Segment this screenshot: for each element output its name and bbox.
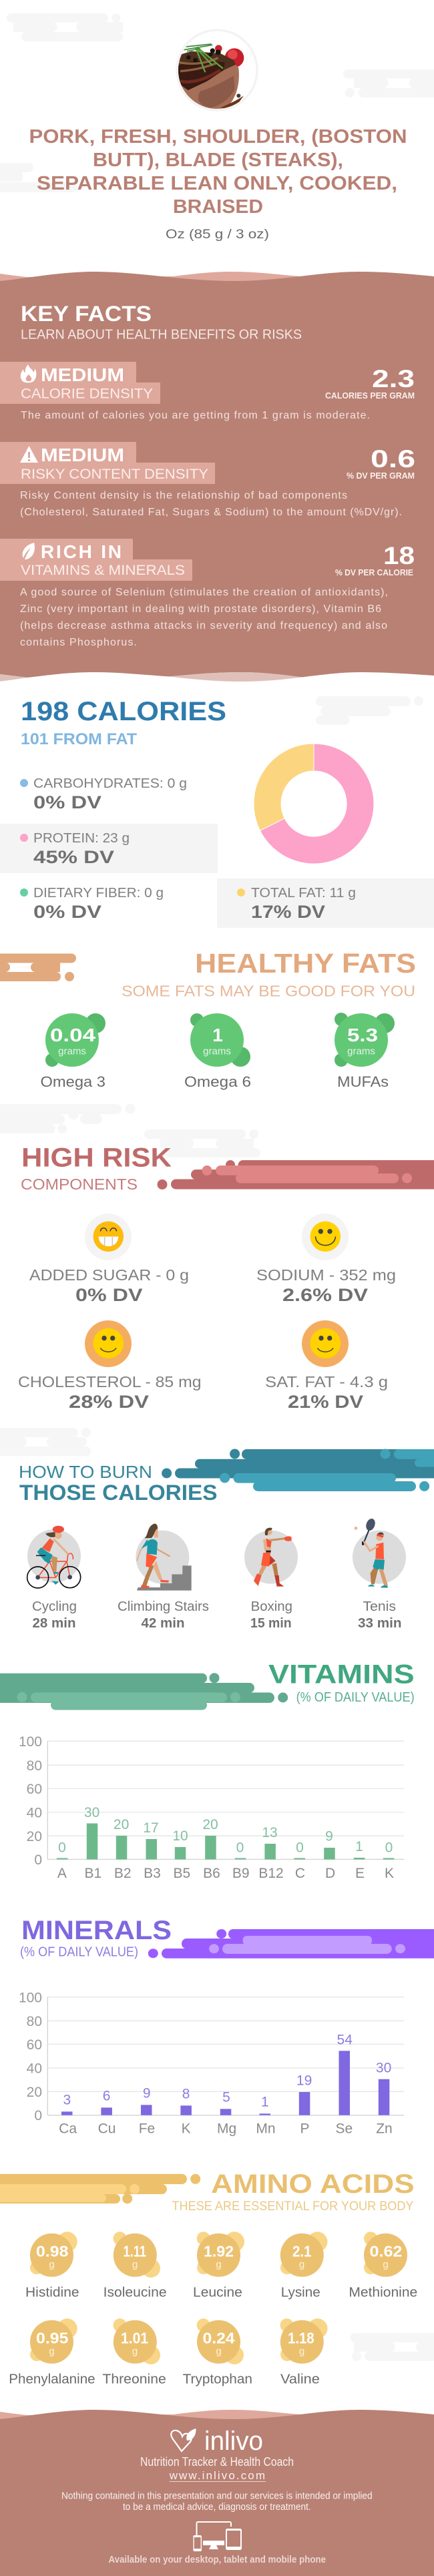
amino: threonine: g [132, 2346, 138, 2357]
activity: climbing stairs: Climbing Stairs [118, 1599, 209, 1614]
section header: minerals [20, 1916, 434, 1960]
title: SEPARABLE LEAN ONLY, COOKED, [37, 173, 397, 194]
disclaimer [61, 2490, 373, 2513]
section header: vitamins [0, 1659, 415, 1710]
bar values: 8 [182, 2087, 190, 2102]
rating: MEDIUM [41, 364, 124, 385]
risk: saturated fat [265, 1320, 388, 1412]
bar values: 30 [84, 1805, 99, 1820]
y axis: 20 [27, 2085, 42, 2100]
activity: climbing stairs: 42 min [142, 1616, 184, 1631]
amino: threonine [102, 2318, 166, 2387]
serving size: Oz (85 g / 3 oz) [166, 228, 269, 242]
icon: neutral smile face [302, 1320, 349, 1367]
unit: CALORIES PER GRAM [325, 391, 415, 401]
x axis: K [182, 2121, 191, 2137]
calories heading: 198 CALORIES [21, 697, 226, 726]
value: 2.3 [372, 365, 415, 393]
y axis: 40 [27, 1805, 42, 1821]
section header: vitamins: VITAMINS [268, 1659, 415, 1689]
x axis: Ca [59, 2121, 77, 2137]
section header: vitamins: (% OF DAILY VALUE) [296, 1690, 415, 1705]
section header: high risk components: COMPONENTS [21, 1176, 138, 1193]
bar values: 0 [385, 1840, 393, 1856]
fact: rich in vitamins and minerals [0, 539, 415, 648]
macro: carbohydrates [20, 776, 187, 812]
fact: risky content density [0, 442, 415, 518]
risk: cholesterol: CHOLESTEROL - 85 mg [18, 1373, 202, 1390]
activity: boxing [244, 1528, 298, 1631]
x axis [59, 2121, 393, 2137]
risk: sodium: 2.6% DV [282, 1285, 368, 1305]
x axis: B2 [114, 1866, 132, 1881]
label: VITAMINS & MINERALS [21, 562, 185, 578]
icon: smiling face [302, 1214, 349, 1260]
icon: leaf [23, 543, 35, 559]
amino: valine: 1.18 [288, 2330, 314, 2347]
x axis: A [57, 1866, 67, 1881]
icon: neutral smile face [85, 1320, 132, 1367]
description: The amount of calories you are getting from 1 gram is moderate. [21, 410, 370, 421]
y axis: 80 [27, 1758, 42, 1774]
amino: tryptophan: Tryptophan [183, 2372, 252, 2387]
y axis: 0 [34, 2108, 42, 2123]
icon: warning [20, 446, 38, 463]
bars [57, 1824, 394, 1860]
amino: histidine: 0.98 [36, 2243, 69, 2260]
macro: carbohydrates: 0% DV [33, 792, 101, 812]
macro: protein [0, 824, 218, 873]
bar values: 10 [172, 1828, 188, 1844]
amino: lysine [280, 2232, 327, 2300]
amino: histidine: Histidine [25, 2286, 79, 2300]
risk: saturated fat: 21% DV [288, 1392, 363, 1412]
y axis: 100 [19, 1990, 42, 2005]
amino: isoleucine: g [132, 2259, 138, 2270]
bar values: 1 [261, 2095, 269, 2110]
x axis: C [295, 1866, 305, 1881]
description [20, 587, 388, 648]
risk: cholesterol: 28% DV [69, 1392, 149, 1412]
activity: tennis: Tenis [363, 1599, 396, 1614]
bar chart: vitamins [19, 1734, 404, 1881]
y axis [19, 1990, 42, 2123]
fat: MUFAs: MUFAs [337, 1073, 389, 1090]
heading: key facts: KEY FACTS [21, 302, 152, 326]
amino: threonine: Threonine [102, 2372, 166, 2387]
disclaimer: to be a medical advice, diagnosis or treatment. [123, 2501, 311, 2513]
illustration: cyclist [27, 1526, 81, 1588]
amino: tryptophan: 0.24 [203, 2330, 235, 2347]
disclaimer: Nothing contained in this presentation and our services is intended or implied [61, 2490, 373, 2501]
x axis: Se [335, 2121, 353, 2137]
activity: boxing: 15 min [250, 1616, 292, 1631]
macro: dietary fiber [20, 886, 164, 922]
bar values: 3 [63, 2092, 71, 2107]
fat: omega 3: 0.04 [50, 1025, 96, 1045]
availability note: Available on your desktop, tablet and mobile phone [108, 2554, 326, 2565]
section header: how to burn those calories: THOSE CALORIES [19, 1481, 218, 1505]
bar values: 0 [236, 1840, 244, 1856]
description: contains Phosphorus. [20, 637, 137, 648]
amino: threonine: 1.01 [121, 2330, 148, 2347]
panel: key facts [0, 272, 434, 682]
amino: tryptophan [183, 2318, 252, 2387]
x axis: K [385, 1866, 394, 1881]
bar values: 54 [337, 2032, 353, 2047]
x axis: P [300, 2121, 310, 2137]
illustration: boxer [244, 1528, 298, 1587]
x axis: Mg [217, 2121, 236, 2137]
risk: sodium: SODIUM - 352 mg [256, 1266, 396, 1284]
bar values: 6 [103, 2089, 110, 2104]
calories from fat: 101 FROM FAT [21, 730, 137, 748]
x axis: B5 [174, 1866, 190, 1881]
risk: cholesterol [18, 1320, 202, 1412]
activity: climbing stairs [118, 1524, 209, 1631]
amino: tryptophan: g [216, 2346, 222, 2357]
description [20, 490, 402, 518]
fact: calorie density [0, 362, 415, 421]
icon: desktop, tablet and phone [193, 2521, 242, 2551]
amino: isoleucine [103, 2232, 167, 2300]
bar values: 0 [58, 1840, 66, 1856]
amino: methionine: Methionine [349, 2286, 417, 2300]
section header: how to burn those calories [19, 1449, 434, 1505]
bar values: 9 [143, 2086, 151, 2101]
amino: lysine: 2.1 [292, 2243, 312, 2260]
amino: phenylalanine: g [49, 2346, 55, 2357]
amino: lysine: Lysine [281, 2286, 320, 2300]
description: (helps decrease asthma attacks in severity and frequency) and also [20, 620, 387, 631]
bar values [63, 2032, 391, 2110]
amino: valine [280, 2318, 327, 2387]
bar values: 20 [114, 1817, 129, 1832]
section header: amino acids: THESE ARE ESSENTIAL FOR YOUR BODY [172, 2199, 414, 2214]
icon: grinning face [85, 1214, 132, 1260]
macro: total fat [217, 878, 434, 928]
amino: isoleucine: 1.11 [123, 2243, 146, 2260]
fat: omega 6 [184, 1013, 251, 1090]
section header: minerals: MINERALS [21, 1916, 172, 1945]
rating: MEDIUM [41, 445, 124, 465]
x axis: Cu [98, 2121, 116, 2137]
value: 18 [383, 542, 415, 569]
fat: MUFAs [335, 1013, 395, 1090]
website: www.inlivo.com [169, 2469, 265, 2482]
icon: flame [21, 364, 36, 382]
risk: sodium [256, 1214, 396, 1305]
x axis: E [355, 1866, 365, 1881]
fat: omega 3: grams [58, 1045, 86, 1057]
x axis: B6 [203, 1866, 220, 1881]
x axis: Zn [376, 2121, 393, 2137]
amino: leucine: g [216, 2259, 222, 2270]
amino: phenylalanine: Phenylalanine [9, 2372, 95, 2387]
x axis: Mn [256, 2121, 276, 2137]
amino: leucine: 1.92 [204, 2243, 234, 2260]
fat: omega 3 [40, 1013, 105, 1090]
y axis: 20 [27, 1829, 42, 1844]
label: RISKY CONTENT DENSITY [21, 466, 208, 482]
bar chart: minerals [19, 1990, 404, 2137]
macro: carbohydrates: CARBOHYDRATES: 0 g [33, 776, 187, 791]
bar values: 17 [143, 1820, 159, 1836]
bar values [58, 1805, 393, 1856]
activity: tennis [353, 1517, 406, 1631]
bars [61, 2051, 389, 2115]
bar values: 9 [325, 1829, 333, 1844]
description: A good source of Selenium (stimulates the creation of antioxidants), [20, 587, 388, 598]
amino: isoleucine: Isoleucine [103, 2286, 167, 2300]
amino: valine: g [299, 2346, 304, 2357]
illustration: woman on stairs [136, 1524, 192, 1591]
amino: valine: Valine [280, 2372, 320, 2387]
rating: RICH IN [41, 541, 122, 562]
activity: boxing: Boxing [251, 1599, 292, 1614]
subheading: LEARN ABOUT HEALTH BENEFITS OR RISKS [21, 327, 302, 342]
fat: omega 6: 1 [212, 1025, 223, 1045]
activity: cycling [27, 1526, 81, 1631]
section header: amino acids [0, 2169, 415, 2214]
description: Risky Content density is the relationship of bad components [20, 490, 347, 501]
bar values: 5 [222, 2090, 230, 2105]
panel: footer [0, 2410, 434, 2576]
amino: leucine [193, 2232, 244, 2300]
bar values: 0 [296, 1840, 304, 1856]
amino: lysine: g [299, 2259, 304, 2270]
title: PORK, FRESH, SHOULDER, (BOSTON [29, 126, 407, 148]
x axis: B9 [232, 1866, 250, 1881]
risk: added sugar [29, 1214, 189, 1305]
title [29, 126, 407, 218]
bar values: 20 [202, 1817, 218, 1832]
amino: phenylalanine: 0.95 [36, 2330, 69, 2347]
risk: saturated fat: SAT. FAT - 4.3 g [265, 1373, 388, 1390]
y axis: 0 [34, 1852, 42, 1868]
fat: omega 3: Omega 3 [40, 1073, 105, 1090]
macro: dietary fiber: DIETARY FIBER: 0 g [33, 886, 164, 900]
amino: leucine: Leucine [193, 2286, 242, 2300]
macro: protein: PROTEIN: 23 g [33, 831, 130, 846]
macro: protein: 45% DV [33, 847, 114, 867]
illustration: tennis player [353, 1517, 406, 1588]
y axis: 100 [19, 1734, 42, 1750]
x axis: B12 [258, 1866, 284, 1881]
logo: inlivo: inlivo [204, 2426, 263, 2456]
amino: methionine: g [383, 2259, 389, 2270]
fat: MUFAs: grams [347, 1045, 375, 1057]
fat: MUFAs: 5.3 [347, 1025, 378, 1045]
y axis: 40 [27, 2061, 42, 2077]
x axis: D [325, 1866, 335, 1881]
bar values: 1 [355, 1839, 363, 1854]
x axis [57, 1866, 394, 1881]
x axis: B1 [84, 1866, 101, 1881]
logo: inlivo [171, 2426, 263, 2456]
y axis [19, 1734, 42, 1868]
fat: omega 6: Omega 6 [184, 1073, 251, 1090]
value: 0.6 [371, 445, 415, 473]
bar values: 13 [262, 1825, 278, 1840]
activity: cycling: 28 min [32, 1616, 76, 1631]
section header: healthy fats [0, 948, 416, 1000]
title: BUTT), BLADE (STEAKS), [93, 150, 343, 171]
bar values: 30 [376, 2061, 391, 2076]
risk: added sugar: ADDED SUGAR - 0 g [29, 1266, 189, 1284]
section header: high risk components: HIGH RISK [21, 1143, 172, 1172]
food image: braised pork steak on a round plate [177, 30, 257, 110]
activity: cycling: Cycling [32, 1599, 77, 1614]
amino: histidine [25, 2232, 79, 2300]
section header: amino acids: AMINO ACIDS [211, 2169, 415, 2199]
section header: minerals: (% OF DAILY VALUE) [20, 1945, 138, 1960]
description: (Cholesterol, Saturated Fat, Sugars & Sodium) to the amount (%DV/gr). [20, 507, 402, 518]
macro: dietary fiber: 0% DV [33, 902, 101, 922]
y axis: 60 [27, 2037, 42, 2053]
fat: omega 6: grams [203, 1045, 231, 1057]
x axis: Fe [139, 2121, 155, 2137]
section header: high risk components [21, 1143, 434, 1193]
macro: total fat: 17% DV [251, 902, 325, 922]
title: BRAISED [173, 196, 263, 218]
amino: methionine [349, 2232, 417, 2300]
risk: added sugar: 0% DV [75, 1285, 143, 1305]
section header: healthy fats: SOME FATS MAY BE GOOD FOR YOU [122, 983, 415, 1000]
unit: % DV PER GRAM [347, 471, 415, 481]
section header: healthy fats: HEALTHY FATS [195, 948, 416, 979]
y axis: 80 [27, 2014, 42, 2029]
description: Zinc (very important in dealing with prostate disorders), Vitamin B6 [20, 603, 381, 615]
macro: total fat: TOTAL FAT: 11 g [251, 886, 356, 900]
amino: histidine: g [49, 2259, 55, 2270]
section header: how to burn those calories: HOW TO BURN [19, 1462, 152, 1482]
unit: % DV PER CALORIE [335, 567, 413, 577]
amino: methionine: 0.62 [370, 2243, 402, 2260]
donut chart: macronutrients [254, 744, 374, 864]
x axis: B3 [144, 1866, 161, 1881]
label: CALORIE DENSITY [21, 386, 153, 402]
bar values: 19 [296, 2073, 312, 2089]
y axis: 60 [27, 1782, 42, 1797]
amino: phenylalanine [9, 2318, 95, 2387]
tagline: Nutrition Tracker & Health Coach [140, 2455, 294, 2469]
activity: tennis: 33 min [358, 1616, 402, 1631]
